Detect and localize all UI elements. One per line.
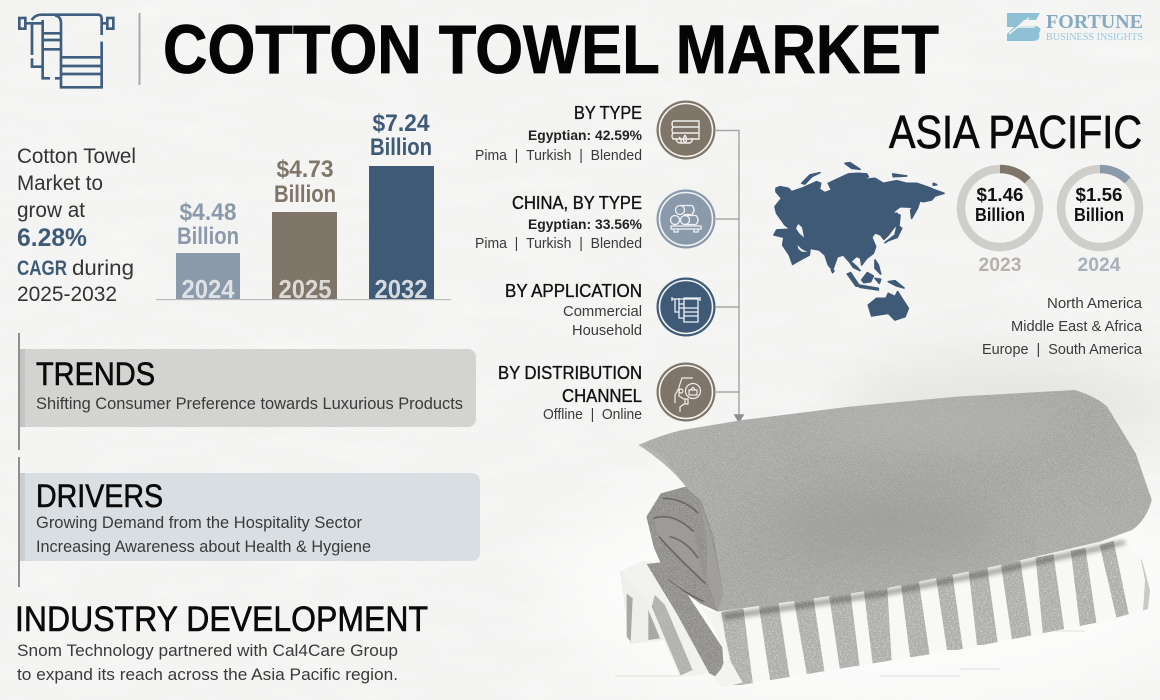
panel: trends: Shifting Consumer Preference towards Luxurious Products [36, 394, 463, 413]
panel: drivers: Growing Demand from the Hospitality Sector [36, 513, 362, 532]
segment: by type: Egyptian: 42.59% [528, 127, 643, 143]
other regions list: North America [1047, 295, 1143, 312]
segment: by application [505, 281, 642, 339]
growth statement: Cotton Towel [17, 145, 136, 168]
logo: Fortune Business Insights: BUSINESS INSIGHTS [1046, 32, 1143, 43]
donut: 2023 value: $1.46 [976, 185, 1024, 205]
shadow between towels [722, 540, 1126, 620]
growth statement: Market to [17, 172, 103, 195]
logo: Fortune Business Insights: FORTUNE [1046, 11, 1143, 33]
logo: Fortune Business Insights [1007, 11, 1143, 43]
other regions list: Europe | South America [982, 341, 1143, 358]
growth statement: grow at [17, 199, 85, 222]
panel: trends [18, 333, 476, 450]
segment: by distribution channel [498, 363, 642, 423]
panel: drivers: Increasing Awareness about Health & Hygiene [36, 537, 371, 556]
industry development heading and text: INDUSTRY DEVELOPMENT [15, 600, 428, 639]
segment: by type [475, 103, 643, 164]
growth statement: during [72, 257, 134, 280]
header divider [138, 13, 140, 85]
donut: 2023 value: 2023 [978, 255, 1022, 276]
segment: by distribution channel: BY DISTRIBUTION [498, 363, 642, 383]
industry development heading and text: to expand its reach across the Asia Pacific region. [17, 665, 398, 684]
other regions list [982, 295, 1143, 358]
other regions list: Middle East & Africa [1011, 318, 1143, 335]
striped lower towel [715, 535, 1155, 690]
icon: towel rack [656, 278, 716, 336]
industry development heading and text: Snom Technology partnered with Cal4Care Group [17, 641, 398, 660]
bar 2032: Billion [370, 134, 432, 161]
bar 2024: $4.48 [180, 199, 236, 226]
towel end folds on left [620, 561, 727, 677]
segment: by distribution channel: CHANNEL [562, 386, 642, 406]
growth statement [17, 145, 136, 306]
top grey towel [639, 390, 1152, 612]
panel: drivers [18, 457, 480, 587]
panel: drivers: DRIVERS [36, 478, 163, 514]
map: Asia Pacific [774, 163, 944, 320]
industry development heading and text [15, 600, 428, 684]
bar 2025: Billion [274, 181, 336, 208]
bar 2032 [369, 110, 434, 304]
bar 2024 [176, 199, 240, 304]
bar 2032: $7.24 [372, 110, 430, 137]
segment: China by type: CHINA, BY TYPE [512, 193, 642, 213]
segment: China by type: Pima | Turkish | Blended [475, 235, 642, 252]
bar 2025: 2025 [278, 274, 332, 304]
bar chart: market size [156, 110, 451, 304]
segment: by type: BY TYPE [574, 103, 642, 123]
donut: 2024 value: $1.56 [1076, 185, 1122, 205]
segment: by type: Pima | Turkish | Blended [475, 147, 642, 164]
segmentation connector arrow [716, 130, 743, 422]
donut: 2023 value: Billion [975, 205, 1025, 225]
icon: towel on rack header [19, 15, 113, 87]
bar 2025: $4.73 [276, 156, 334, 183]
growth statement: 6.28% [17, 224, 87, 252]
bar 2025 [272, 156, 337, 304]
segment: China by type [475, 193, 643, 252]
donut: 2024 value [1061, 169, 1139, 276]
growth statement: CAGR [17, 257, 67, 280]
floor lines [615, 631, 1085, 676]
growth statement: 2025-2032 [17, 283, 117, 306]
segment: by distribution channel: Offline | Online [543, 406, 642, 423]
icon: rolled towels on tray [656, 190, 716, 248]
title: COTTON TOWEL MARKET [163, 11, 939, 88]
bar 2032: 2032 [374, 274, 428, 304]
donut: 2024 value: Billion [1074, 205, 1124, 225]
icon: stacked towels [656, 100, 716, 160]
segment: by application: Commercial [563, 303, 642, 320]
white curl at towel corner [702, 608, 743, 687]
bar 2024: Billion [177, 223, 239, 250]
segment: China by type: Egyptian: 33.56% [528, 216, 643, 232]
photo: folded cotton towels [615, 390, 1155, 690]
segment: by application: BY APPLICATION [505, 281, 642, 301]
bar 2024: 2024 [182, 274, 235, 304]
icon: phone shopping [656, 362, 716, 422]
segment: by application: Household [572, 322, 642, 339]
donut: 2023 value [961, 169, 1039, 276]
panel: trends: TRENDS [36, 356, 155, 392]
donut: 2024 value: 2024 [1078, 255, 1121, 276]
